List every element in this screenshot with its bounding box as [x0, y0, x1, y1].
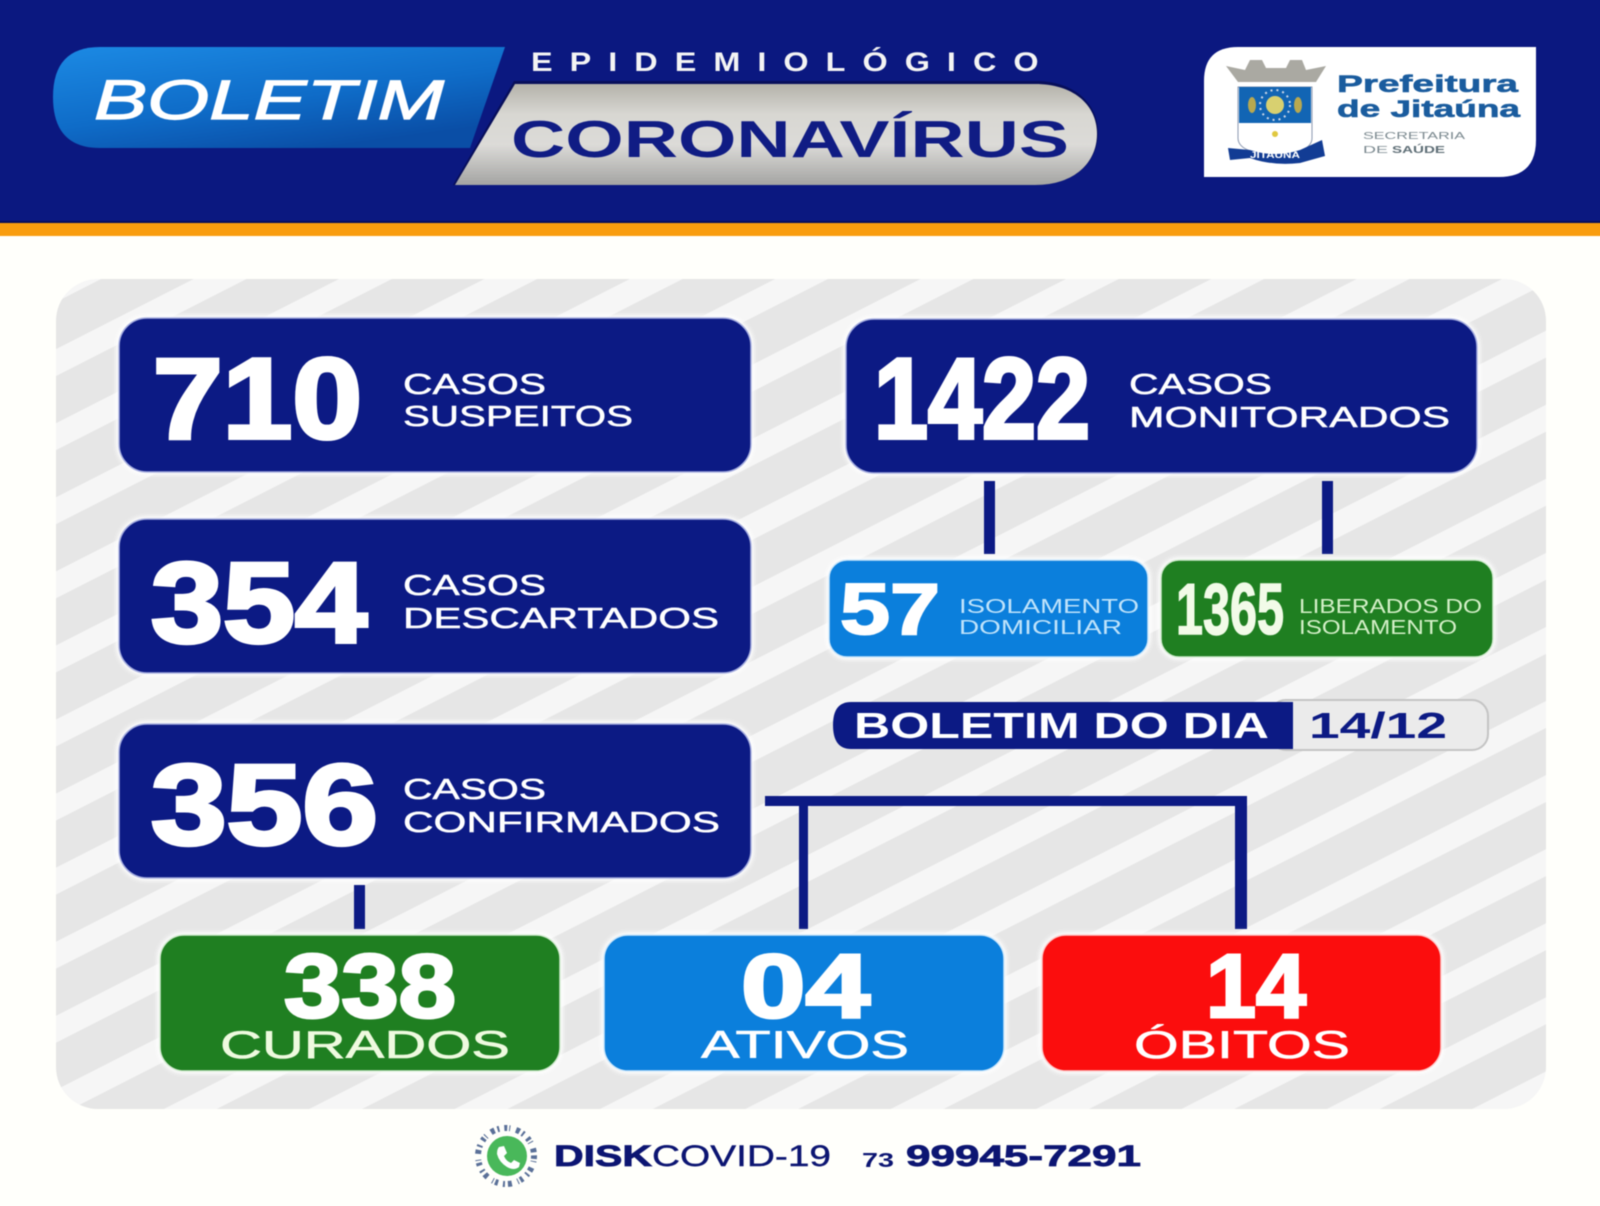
- coronavírus banner: CORONAVÍRUS: [511, 111, 1069, 169]
- card: isolamento domiciliar: 57: [840, 570, 940, 650]
- card: curados: [160, 935, 560, 1071]
- logo text: DE: [1363, 145, 1389, 156]
- connectors: [354, 481, 1333, 929]
- panel: striped background: [56, 279, 1546, 1109]
- logo text: de Jitaúna: [1337, 96, 1521, 123]
- logo text: [1337, 71, 1521, 156]
- footer: disk covid contact: COVID-19: [652, 1140, 831, 1173]
- card: óbitos: 14: [1206, 937, 1306, 1037]
- header band: [0, 0, 1600, 236]
- card: casos confirmados: 356: [151, 742, 378, 869]
- card: casos confirmados: CASOS: [403, 774, 546, 806]
- logo: prefeitura de jitaúna: [1204, 47, 1536, 177]
- card: casos suspeitos: SUSPEITOS: [403, 401, 633, 433]
- card: casos monitorados: CASOS: [1129, 369, 1272, 401]
- card: casos descartados: CASOS: [403, 570, 546, 602]
- card: casos monitorados: MONITORADOS: [1129, 402, 1450, 434]
- card: ativos: 04: [741, 937, 870, 1037]
- card: liberados do isolamento: ISOLAMENTO: [1299, 617, 1457, 639]
- card: casos confirmados: CONFIRMADOS: [403, 807, 720, 839]
- card: isolamento domiciliar: [829, 560, 1148, 657]
- card: casos descartados: 354: [151, 540, 367, 667]
- card: isolamento domiciliar: ISOLAMENTO: [959, 596, 1139, 618]
- card: casos suspeitos: [119, 318, 751, 472]
- icon: whatsapp virus badge: [478, 1128, 534, 1184]
- date bar: boletim do dia: BOLETIM DO DIA: [854, 705, 1269, 746]
- icon: coat of arms: JITAÚNA: [1250, 149, 1301, 160]
- card: óbitos: ÓBITOS: [1134, 1024, 1350, 1067]
- card: liberados do isolamento: 1365: [1176, 570, 1284, 650]
- logo text: Prefeitura: [1337, 71, 1519, 98]
- footer: disk covid contact: [478, 1128, 1141, 1184]
- date bar: boletim do dia: [833, 700, 1488, 750]
- card: casos suspeitos: CASOS: [403, 369, 546, 401]
- boletim pill: [53, 47, 505, 148]
- card: liberados do isolamento: LIBERADOS DO: [1299, 596, 1482, 618]
- card: liberados do isolamento: [1161, 560, 1493, 657]
- card: casos suspeitos: 710: [153, 336, 362, 463]
- icon: coat of arms: [1226, 60, 1326, 164]
- card: casos monitorados: [846, 319, 1477, 473]
- footer: disk covid contact: DISK: [554, 1140, 652, 1173]
- card: curados: 338: [284, 937, 456, 1037]
- boletim pill: BOLETIM: [94, 68, 444, 131]
- logo text: SECRETARIA: [1363, 131, 1466, 142]
- card: casos confirmados: [119, 724, 751, 878]
- card: ativos: ATIVOS: [701, 1024, 909, 1067]
- date bar: boletim do dia: 14/12: [1309, 705, 1447, 746]
- footer: disk covid contact: 73: [862, 1150, 894, 1172]
- footer: disk covid contact: 99945-7291: [906, 1140, 1141, 1173]
- card: curados: CURADOS: [220, 1024, 510, 1067]
- card: óbitos: [1042, 935, 1441, 1071]
- card: casos descartados: [119, 519, 751, 673]
- epidemiológico heading: EPIDEMIOLÓGICO: [531, 47, 1039, 77]
- coronavírus banner: [453, 81, 1098, 185]
- card: isolamento domiciliar: DOMICILIAR: [959, 617, 1122, 639]
- card: casos monitorados: 1422: [874, 336, 1090, 463]
- card: ativos: [604, 935, 1004, 1071]
- logo text: SAÚDE: [1392, 143, 1445, 156]
- card: casos descartados: DESCARTADOS: [403, 603, 719, 635]
